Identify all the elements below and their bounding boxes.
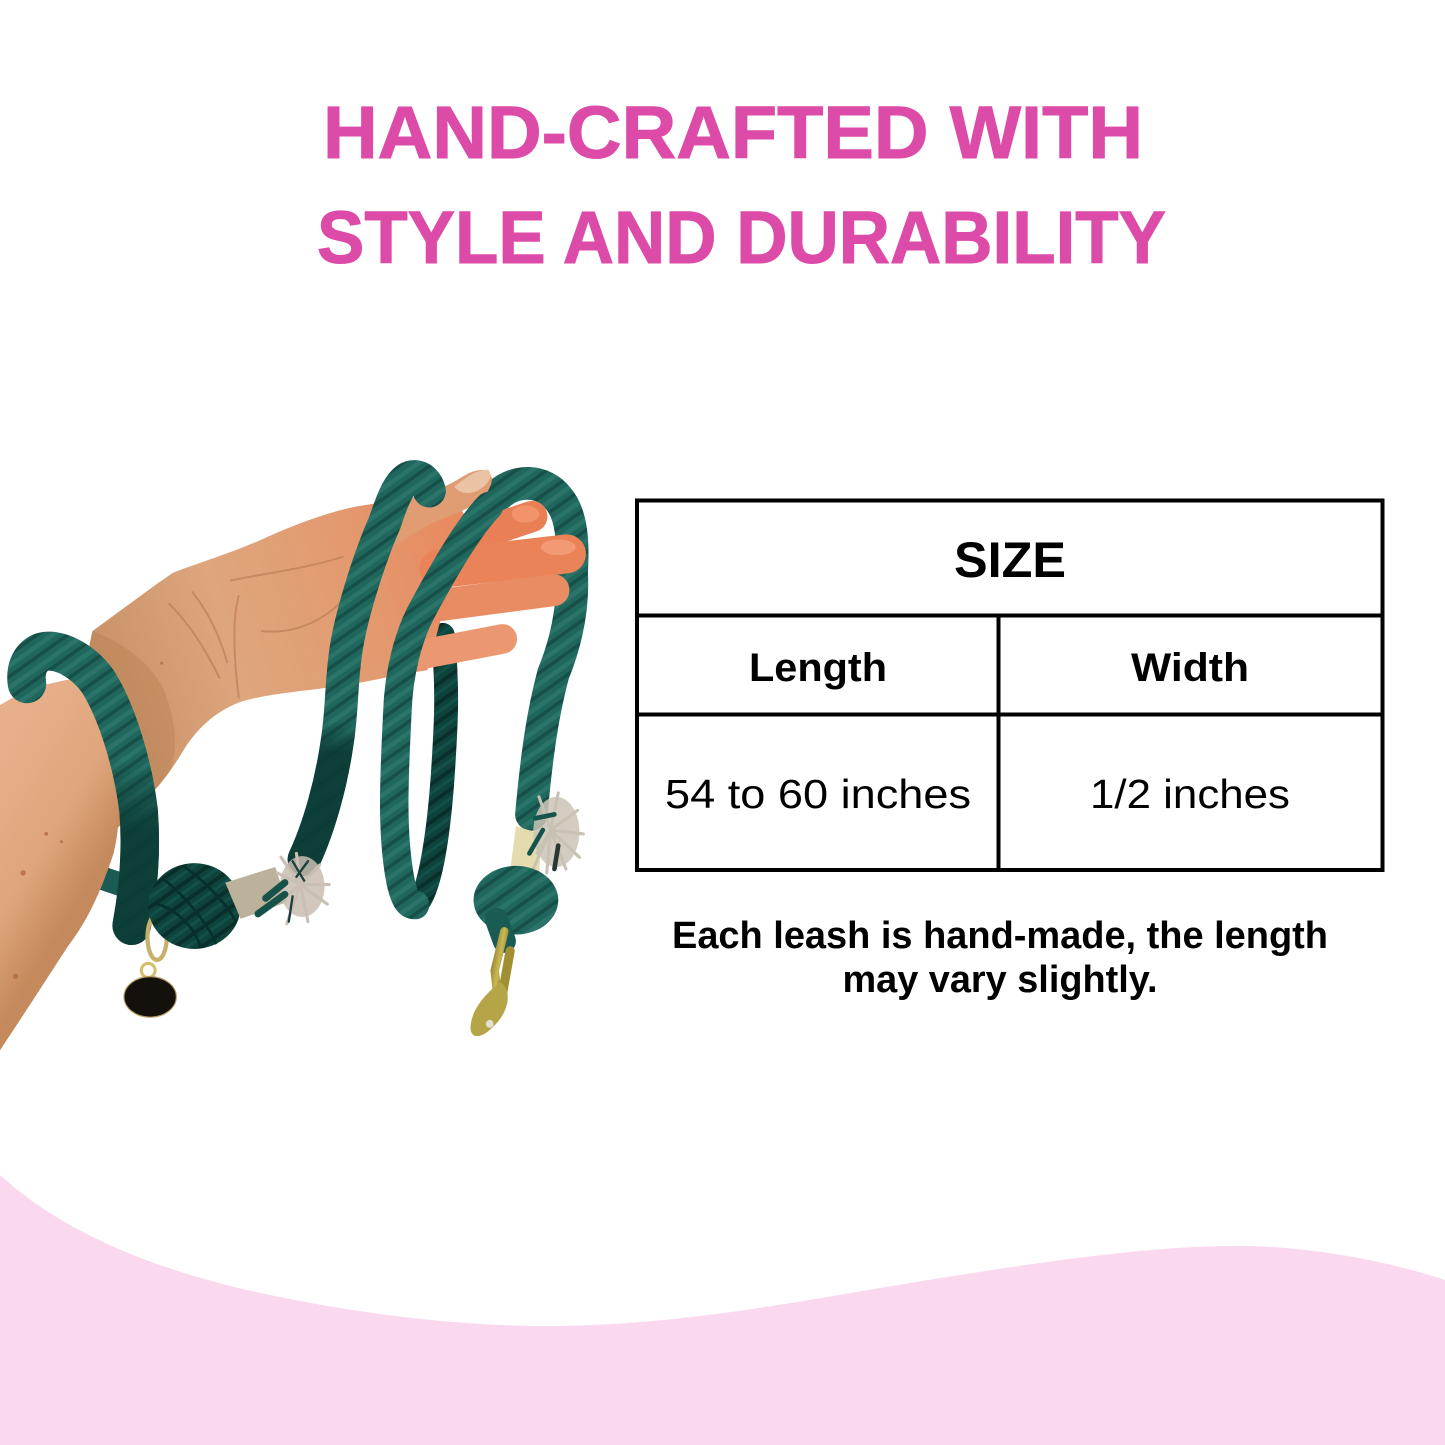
fringe, left — [258, 853, 329, 924]
leash knot — [474, 866, 558, 941]
cell: width value: 1/2 inches — [1090, 771, 1290, 817]
rope: far side of the loop behind the fingers — [415, 635, 446, 905]
title — [317, 91, 1166, 279]
fingers — [422, 506, 576, 654]
title: STYLE AND DURABILITY — [317, 196, 1166, 279]
freckles — [13, 662, 163, 979]
rope: near side of the loop over the palm — [394, 506, 489, 905]
palm shading — [83, 631, 175, 830]
fringe, right — [529, 793, 583, 873]
palm creases — [169, 557, 350, 697]
rope: around the wrist — [26, 651, 140, 926]
note text: may vary slightly. — [842, 959, 1158, 1001]
collar knot — [148, 863, 241, 949]
cream sleeve, right — [510, 826, 541, 883]
thumb — [377, 470, 492, 557]
title: HAND-CRAFTED WITH — [323, 91, 1143, 174]
brass snap clip — [470, 931, 510, 1036]
forearm — [0, 678, 118, 1050]
note text — [672, 915, 1328, 1001]
rope: long strand through the hand — [304, 477, 429, 859]
cream sleeve, left — [225, 867, 287, 919]
table: size chart — [637, 500, 1382, 870]
wrist and palm — [83, 498, 474, 830]
cell: length value: 54 to 60 inches — [665, 771, 971, 817]
background wave — [0, 1175, 1445, 1445]
column header: Width: Width — [1131, 646, 1249, 690]
note text: Each leash is hand-made, the length — [672, 915, 1328, 957]
photo: hand holding green rope leash — [0, 470, 583, 1050]
column header: Length: Length — [749, 646, 887, 690]
rope: end behind forearm — [104, 879, 162, 898]
table header: SIZE: SIZE — [954, 532, 1066, 588]
rope: top right curve and long drop — [499, 483, 572, 814]
ring and tag — [124, 915, 176, 1017]
